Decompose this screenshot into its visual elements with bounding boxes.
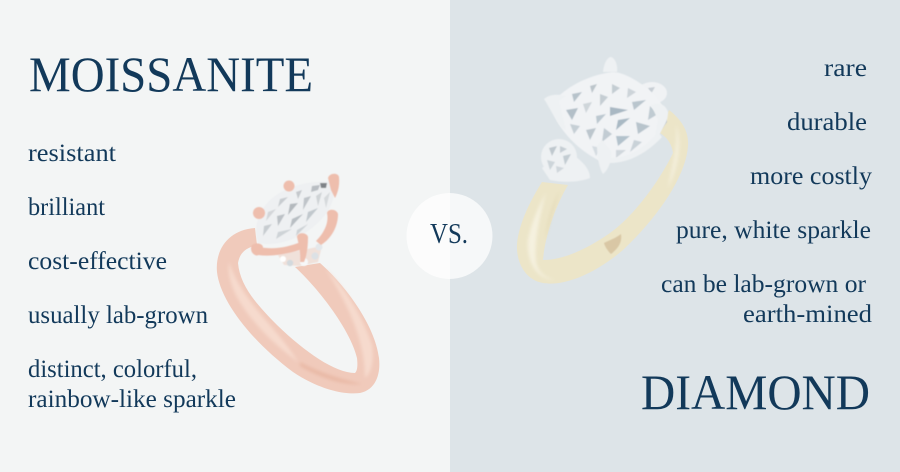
ring band [217,228,379,393]
panel: moissanite text [28,46,313,413]
text: distinct, colorful: distinct, colorful, [28,354,197,383]
accent stones [278,244,322,266]
text: usually lab-grown: usually lab-grown [28,300,208,329]
vs badge [406,193,492,279]
text: earth-mined: earth-mined [743,299,872,328]
band shading [528,125,679,280]
band tan reflection [604,234,621,254]
white metal prongs [544,57,668,174]
heading: moissanite: MOISSANITE [29,46,313,102]
text: resistant: resistant [28,138,116,167]
marquise stone [256,182,334,244]
text: rare: rare [824,53,867,82]
icon: rose gold marquise ring [217,174,379,393]
basket shadow [608,112,667,160]
icon: yellow gold cushion ring [517,57,688,284]
prongs and setting [251,174,339,262]
text: more costly: more costly [750,161,872,190]
panel: moissanite background [0,0,450,472]
text: vs: VS. [430,218,468,250]
band shading [229,262,373,384]
panel: diamond background [450,0,900,472]
text: pure, white sparkle: pure, white sparkle [676,215,871,244]
cushion stone [552,72,665,162]
panel: diamond text [641,53,872,420]
text: brilliant: brilliant [28,192,105,221]
left side stone [541,139,590,182]
text: rainbow-like sparkle: rainbow-like sparkle [28,384,236,413]
heading: diamond: DIAMOND [641,364,870,420]
text: can be lab-grown or: can be lab-grown or [661,269,867,298]
text: cost-effective: cost-effective [28,246,167,275]
ring band [517,110,688,284]
text: durable: durable [787,107,867,136]
right side stone [637,82,667,104]
